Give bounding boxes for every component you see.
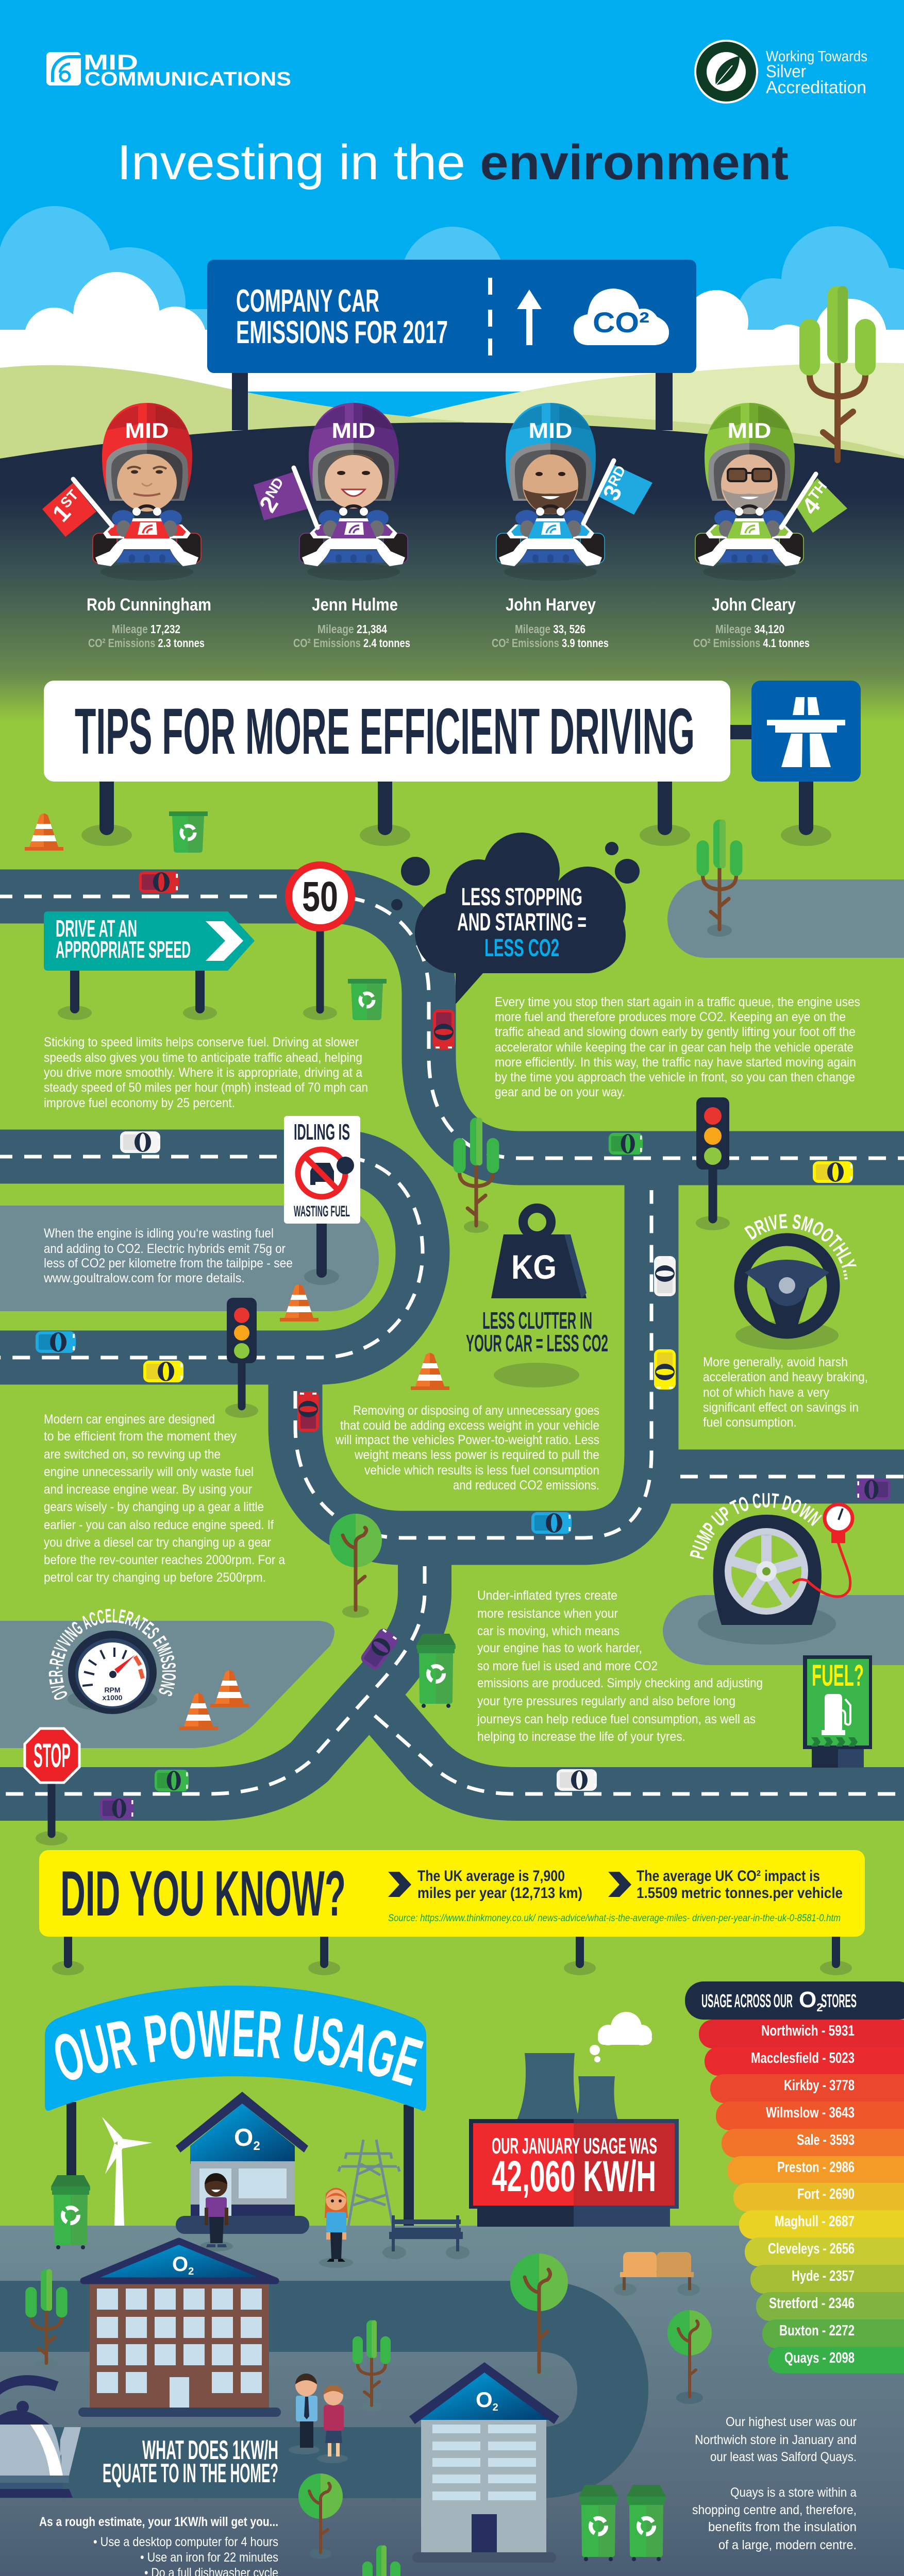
road sign: company car emissions: EMISSIONS FOR 2017	[236, 315, 448, 350]
chart: usage across O2 stores: Maghull - 2687	[775, 2213, 855, 2230]
panel: did you know: Source: https://www.thinkmoney.co.uk/ news-advice/what-is-the-average-miles- driven-per-year-in-the-uk-0-8581-0.htm	[388, 1913, 841, 1924]
cars	[36, 871, 891, 1819]
heading: did you know: DID YOU KNOW?	[60, 1858, 346, 1929]
grey O2 building	[409, 2362, 559, 2563]
accreditation badge	[694, 40, 867, 104]
arrow sign: drive at an appropriate speed: DRIVE AT AN	[56, 915, 137, 942]
flag 3rd	[583, 461, 652, 523]
text: speed limits	[44, 1035, 368, 1110]
driver stats: CO² Emissions 3.9 tonnes	[492, 636, 609, 650]
tree middle	[454, 1117, 499, 1233]
brown office building: O	[172, 2253, 188, 2276]
road sign: company car emissions	[207, 260, 696, 430]
accreditation badge: Working Towards	[766, 48, 867, 65]
flag 4th	[781, 474, 847, 533]
idling is wasting fuel sign	[284, 1116, 360, 1285]
traffic light	[696, 1097, 730, 1230]
driver stats: Mileage 21,384	[317, 622, 387, 636]
grass background	[0, 721, 904, 2231]
arc text: drive smoothly: DRIVE SMOOTHLY...	[744, 1214, 857, 1280]
text: idling	[43, 1226, 293, 1285]
billboard: january usage: 42,060 KW/H	[492, 2152, 656, 2200]
flag 4th: TH	[806, 478, 830, 503]
accreditation badge: Silver	[766, 62, 806, 81]
orange bench	[614, 2252, 700, 2296]
racer 3: John Harvey	[496, 403, 605, 581]
text: drive smoothly: significant effect on savings in	[703, 1400, 859, 1415]
recycle bin large	[416, 1634, 456, 1708]
text: idling: www.goultralow.com for more details.	[43, 1271, 245, 1285]
flag 1st	[42, 479, 112, 537]
text: drive smoothly: not of which have a very	[703, 1385, 829, 1400]
cone top left	[25, 814, 63, 851]
stop sign	[25, 1728, 79, 1845]
racer 4: John Cleary: MID	[728, 418, 771, 443]
tree in grey patch	[697, 820, 742, 937]
chart: usage across O2 stores: Buxton - 2272	[779, 2323, 855, 2339]
heading: less clutter: YOUR CAR = LESS CO2	[466, 1330, 608, 1357]
text: drive smoothly: More generally, avoid harsh	[703, 1355, 848, 1369]
brown office building	[78, 2241, 281, 2417]
road loop in power section	[0, 2316, 613, 2463]
idling is wasting fuel sign: IDLING IS	[294, 1120, 350, 1145]
rev counter gauge: x1000	[103, 1693, 123, 1702]
chart: usage across O2 stores: Sale - 3593	[797, 2132, 855, 2148]
text: stop start: Every time you stop then start again in a traffic queue, the engine uses	[495, 995, 860, 1009]
cactus middle	[353, 2320, 391, 2412]
text: rough estimate list: • Use an iron for 22 minutes	[140, 2550, 278, 2565]
recycle bin	[51, 2175, 90, 2249]
chart: usage across O2 stores: Cleveleys - 2656	[768, 2241, 855, 2257]
rev counter gauge	[68, 1631, 157, 1714]
text: clutter: weight means less power is required to pull the	[354, 1448, 599, 1462]
rev counter gauge: RPM	[104, 1686, 121, 1694]
chart: usage across O2 stores	[685, 1981, 904, 2374]
grey O2 building: 2	[493, 2402, 498, 2413]
text: drive smoothly: acceleration and heavy braking,	[703, 1370, 868, 1384]
chart: usage across O2 stores: Preston - 2986	[777, 2159, 855, 2176]
round tree	[329, 1514, 382, 1618]
speed limit sign: 50	[302, 873, 338, 920]
panel: did you know: miles per year (12,713 km)	[417, 1885, 582, 1902]
text: speed limits: Sticking to speed limits helps conserve fuel. Driving at slower	[44, 1035, 359, 1049]
chart: usage across O2 stores: Fort - 2690	[797, 2186, 855, 2202]
heading: what does 1kw/h equate to	[103, 2435, 278, 2488]
panel: did you know: The UK average is 7,900	[417, 1868, 565, 1885]
driver stats: Mileage 33, 526	[515, 622, 585, 636]
text: highest user: Quays is a store within a	[730, 2485, 857, 2500]
tree right of sign	[799, 286, 876, 460]
O2 store: 2	[253, 2139, 260, 2153]
heading: less clutter: LESS CLUTTER IN	[482, 1307, 592, 1334]
panel: did you know: 1.5509 metric tonnes.per vehicle	[637, 1885, 843, 1902]
text: tyres: your tyre pressures regularly and also before long	[477, 1694, 735, 1708]
text: clutter	[335, 1403, 599, 1493]
billboard: january usage: OUR JANUARY USAGE WAS	[492, 2133, 657, 2159]
arc text: over-revving: OVER-REVVING ACCELERATES EMISSIONS	[48, 1608, 176, 1700]
text: rough estimate list: • Use a desktop computer for 4 hours	[93, 2535, 278, 2549]
text: highest user	[692, 2415, 857, 2552]
white clouds	[0, 272, 904, 392]
text: drive smoothly: fuel consumption.	[703, 1415, 797, 1430]
text: stop start: more fuel and therefore produces more CO2. Keeping an eye on the	[495, 1010, 846, 1024]
heading: less clutter	[466, 1307, 608, 1387]
cactus left	[25, 2269, 68, 2370]
text: clutter: and reduced CO2 emissions.	[453, 1478, 599, 1493]
flag 2nd: 2	[254, 492, 283, 517]
wind turbine	[102, 2117, 153, 2226]
text: tyres: car is moving, which means	[477, 1624, 620, 1638]
driver stats: Rob Cunningham	[87, 595, 211, 615]
text: rough estimate list: As a rough estimate, your 1KW/h will get you...	[39, 2515, 278, 2529]
O2 store	[176, 2092, 309, 2234]
text: idling: When the engine is idling you‘re wasting fuel	[44, 1226, 274, 1241]
road sign: company car emissions: COMPANY CAR	[236, 283, 379, 319]
flag 4th: 4	[796, 493, 826, 519]
text: tyres: your engine has to work harder,	[477, 1641, 642, 1655]
panel: did you know	[39, 1850, 865, 1937]
logo: MID Communications: MID	[83, 50, 138, 74]
text: modern engines	[44, 1412, 285, 1585]
racer 1: Rob Cunningham: MID	[125, 418, 169, 443]
text: speed limits: you drive more smoothly. Where it is appropriate, driving at a	[44, 1065, 362, 1080]
flag 1st: 1	[47, 499, 76, 527]
arc text: pump up to cut down: PUMP UP TO CUT DOWN	[690, 1493, 822, 1559]
chart: usage across O2 stores: Kirkby - 3778	[784, 2077, 855, 2094]
racer 3: John Harvey: MID	[529, 418, 572, 443]
grey O2 building: O	[476, 2387, 493, 2412]
couple	[289, 2374, 348, 2463]
title: environment	[480, 135, 789, 190]
navy ground with gradient into grass	[0, 422, 904, 732]
text: speed limits: steady speed of 50 miles per hour (mph) instead of 70 mph can	[44, 1080, 368, 1095]
chart: usage across O2 stores: Quays - 2098	[784, 2350, 855, 2366]
text: tyres	[477, 1588, 763, 1744]
arrow sign: drive at an appropriate speed	[44, 911, 255, 1020]
motorway sign	[730, 681, 861, 782]
text: stop start: gear and be on your way.	[495, 1085, 625, 1099]
text: modern engines: to be efficient from the moment they	[44, 1429, 237, 1444]
text: STOP	[34, 1736, 71, 1774]
driver stats: CO² Emissions 2.3 tonnes	[88, 636, 205, 650]
O2 store: O	[234, 2124, 253, 2151]
speech cloud: less stopping and starting: LESS STOPPING	[461, 884, 582, 911]
text: highest user: benefits from the insulation	[708, 2520, 857, 2534]
driver stats: Mileage 34,120	[715, 622, 784, 636]
text: stop start: more efficiently. In this way, the traffic nay have started moving again	[495, 1055, 856, 1070]
recycle bins	[579, 2485, 666, 2561]
cloud of steam	[590, 2012, 652, 2062]
round tree	[298, 2473, 343, 2559]
blue bench	[382, 2215, 470, 2259]
fuel sign	[803, 1655, 872, 1768]
round tree	[667, 2310, 712, 2404]
billboard posts	[81, 778, 831, 846]
text: modern engines: Modern car engines are designed	[44, 1412, 215, 1427]
text: modern engines: before the rev-counter reaches 2000rpm. For a	[44, 1553, 285, 1567]
text: highest user: Our highest user was our	[726, 2415, 857, 2429]
chart: usage across O2 stores: Hyde - 2357	[792, 2268, 855, 2284]
text: drive smoothly	[703, 1355, 868, 1430]
chart: usage across O2 stores: Northwich - 5931	[761, 2023, 855, 2039]
chart: usage across O2 stores: USAGE ACROSS OUR	[701, 1990, 793, 2011]
speech cloud: less stopping and starting: LESS CO2	[484, 935, 559, 962]
flag 1st: ST	[57, 487, 81, 511]
text: tyres: more resistance when your	[477, 1606, 618, 1621]
hills	[0, 363, 904, 466]
driver stats: John Cleary	[712, 595, 796, 615]
weight icon: KG	[491, 1208, 587, 1298]
text: modern engines: petrol car try changing up before 2500rpm.	[44, 1570, 266, 1585]
title: Investing in the	[117, 135, 465, 190]
arrow sign: drive at an appropriate speed: APPROPRIATE SPEED	[56, 936, 191, 963]
driver stats: John Harvey	[506, 595, 596, 615]
person: man in purple	[200, 2173, 233, 2251]
traffic light	[225, 1298, 258, 1418]
racer 1: Rob Cunningham	[93, 403, 201, 581]
recycle bin	[169, 811, 208, 853]
text: clutter: Removing or disposing of any unnecessary goes	[353, 1403, 599, 1418]
round tree	[510, 2253, 568, 2380]
text: EQUATE TO IN THE HOME?	[103, 2459, 278, 2488]
chart: usage across O2 stores: Wilmslow - 3643	[766, 2105, 855, 2121]
cone	[411, 1353, 449, 1390]
text: clutter: that could be adding excess weight in your vehicle	[340, 1418, 599, 1433]
text: stop start	[495, 995, 860, 1099]
recycle bin	[348, 979, 387, 1020]
text: clutter: vehicle which results is less fuel consumption	[364, 1463, 599, 1478]
text: highest user: our least was Salford Quays.	[710, 2450, 857, 2464]
accreditation badge: Accreditation	[766, 78, 866, 97]
pale clouds	[0, 206, 904, 376]
cone	[280, 1284, 319, 1321]
racer 2: Jenn Hulme: MID	[332, 418, 375, 443]
text: modern engines: earlier - you can also reduce engine speed. If	[44, 1518, 274, 1532]
road network	[0, 896, 904, 1794]
heading: what does 1kw/h equate to: WHAT DOES 1KW/H	[142, 2435, 278, 2465]
text: tyres: Under-inflated tyres create	[477, 1588, 617, 1603]
sky background	[0, 0, 904, 466]
flag 3rd: 3	[597, 481, 627, 505]
text: speed limits: improve fuel economy by 25 percent.	[44, 1096, 235, 1110]
cones	[179, 1670, 249, 1730]
title	[117, 135, 789, 190]
chart: usage across O2 stores: STORES	[821, 1990, 857, 2011]
grey patches	[0, 879, 904, 1748]
power usage ground	[0, 2226, 904, 2576]
text: idling: less of CO2 per kilometre from the tailpipe - see	[44, 1256, 293, 1270]
did you know posts	[52, 1935, 852, 1975]
kettle	[0, 2380, 81, 2498]
steering wheel	[735, 1240, 839, 1350]
chart: usage across O2 stores: O	[799, 1987, 816, 2012]
chart: usage across O2 stores: Stretford - 2346	[769, 2295, 855, 2312]
text: highest user: shopping centre and, therefore,	[692, 2503, 857, 2517]
panel: did you know: The average UK CO² impact is	[637, 1868, 820, 1885]
text: modern engines: are switched on, so revving up the	[44, 1447, 221, 1462]
chart: usage across O2 stores: Macclesfield - 5023	[751, 2050, 855, 2066]
text: tyres: helping to increase the life of your tyres.	[477, 1730, 685, 1744]
heading: tips for more efficient driving	[44, 681, 730, 782]
text: clutter: will impact the vehicles Power-to-weight ratio. Less	[335, 1433, 599, 1447]
text: modern engines: you drive a diesel car try changing up a gear	[44, 1535, 271, 1550]
text: stop start: traffic ahead and slowing down early by gently lifting your foot off the	[495, 1025, 856, 1039]
text: idling: and adding to CO2. Electric hybrids emit 75g or	[44, 1242, 286, 1256]
cooling towers	[517, 2053, 618, 2120]
text: modern engines: engine unnecessarily will only waste fuel	[44, 1465, 254, 1479]
road sign: company car emissions: CO²	[593, 306, 649, 338]
text: stop start: by the time you approach the vehicle in front, so you can then change	[495, 1070, 855, 1084]
logo: MID Communications: COMMUNICATIONS	[85, 69, 291, 90]
banner posts	[66, 2102, 414, 2226]
logo: MID Communications	[46, 50, 291, 90]
person: woman in blue	[319, 2188, 353, 2268]
driver stats: CO² Emissions 4.1 tonnes	[693, 636, 810, 650]
text: highest user: of a large, modern centre.	[718, 2538, 857, 2552]
billboard: january usage	[469, 2119, 679, 2227]
driver stats	[87, 595, 810, 650]
text: tyres: so more fuel is used and more CO2	[477, 1659, 658, 1673]
banner: our power usage: OUR POWER USAGE	[55, 2010, 424, 2086]
flag 2nd	[254, 468, 317, 528]
text: modern engines: and increase engine wear. By using your	[44, 1482, 252, 1497]
flag 2nd: ND	[262, 474, 287, 501]
text: tyres: emissions are produced. Simply checking and adjusting	[477, 1676, 763, 1690]
racer 4: John Cleary	[695, 403, 803, 581]
text: rough estimate list	[39, 2515, 278, 2576]
racer 2: Jenn Hulme	[299, 403, 408, 581]
text: stop start: accelerator while keeping the car in gear can help the vehicle operate	[495, 1040, 853, 1055]
weight icon: KG: KG	[511, 1248, 557, 1286]
idling is wasting fuel sign: WASTING FUEL	[294, 1203, 350, 1220]
text: highest user: Northwich store in January and	[695, 2433, 857, 2447]
flag 3rd: RD	[605, 463, 629, 489]
driver stats: Jenn Hulme	[312, 595, 398, 615]
driver stats: Mileage 17,232	[112, 622, 180, 636]
speech cloud: less stopping and starting: AND STARTING =	[457, 909, 587, 936]
brown office building: 2	[188, 2266, 194, 2277]
text: tyres: journeys can help reduce fuel consumption, as well as	[477, 1712, 756, 1726]
speech cloud: less stopping and starting	[391, 833, 640, 1004]
tyre with pressure gauge	[698, 1504, 852, 1645]
text: modern engines: gears wisely - by changing up a gear a little	[44, 1500, 264, 1514]
chart: usage across O2 stores: 2	[816, 2001, 823, 2014]
electricity pylon	[339, 2140, 399, 2226]
text: speed limits: speeds also gives you time to anticipate traffic ahead, helping	[44, 1050, 362, 1065]
speed limit sign	[289, 865, 351, 1020]
cactus	[362, 2545, 400, 2576]
driver stats: CO² Emissions 2.4 tonnes	[293, 636, 410, 650]
